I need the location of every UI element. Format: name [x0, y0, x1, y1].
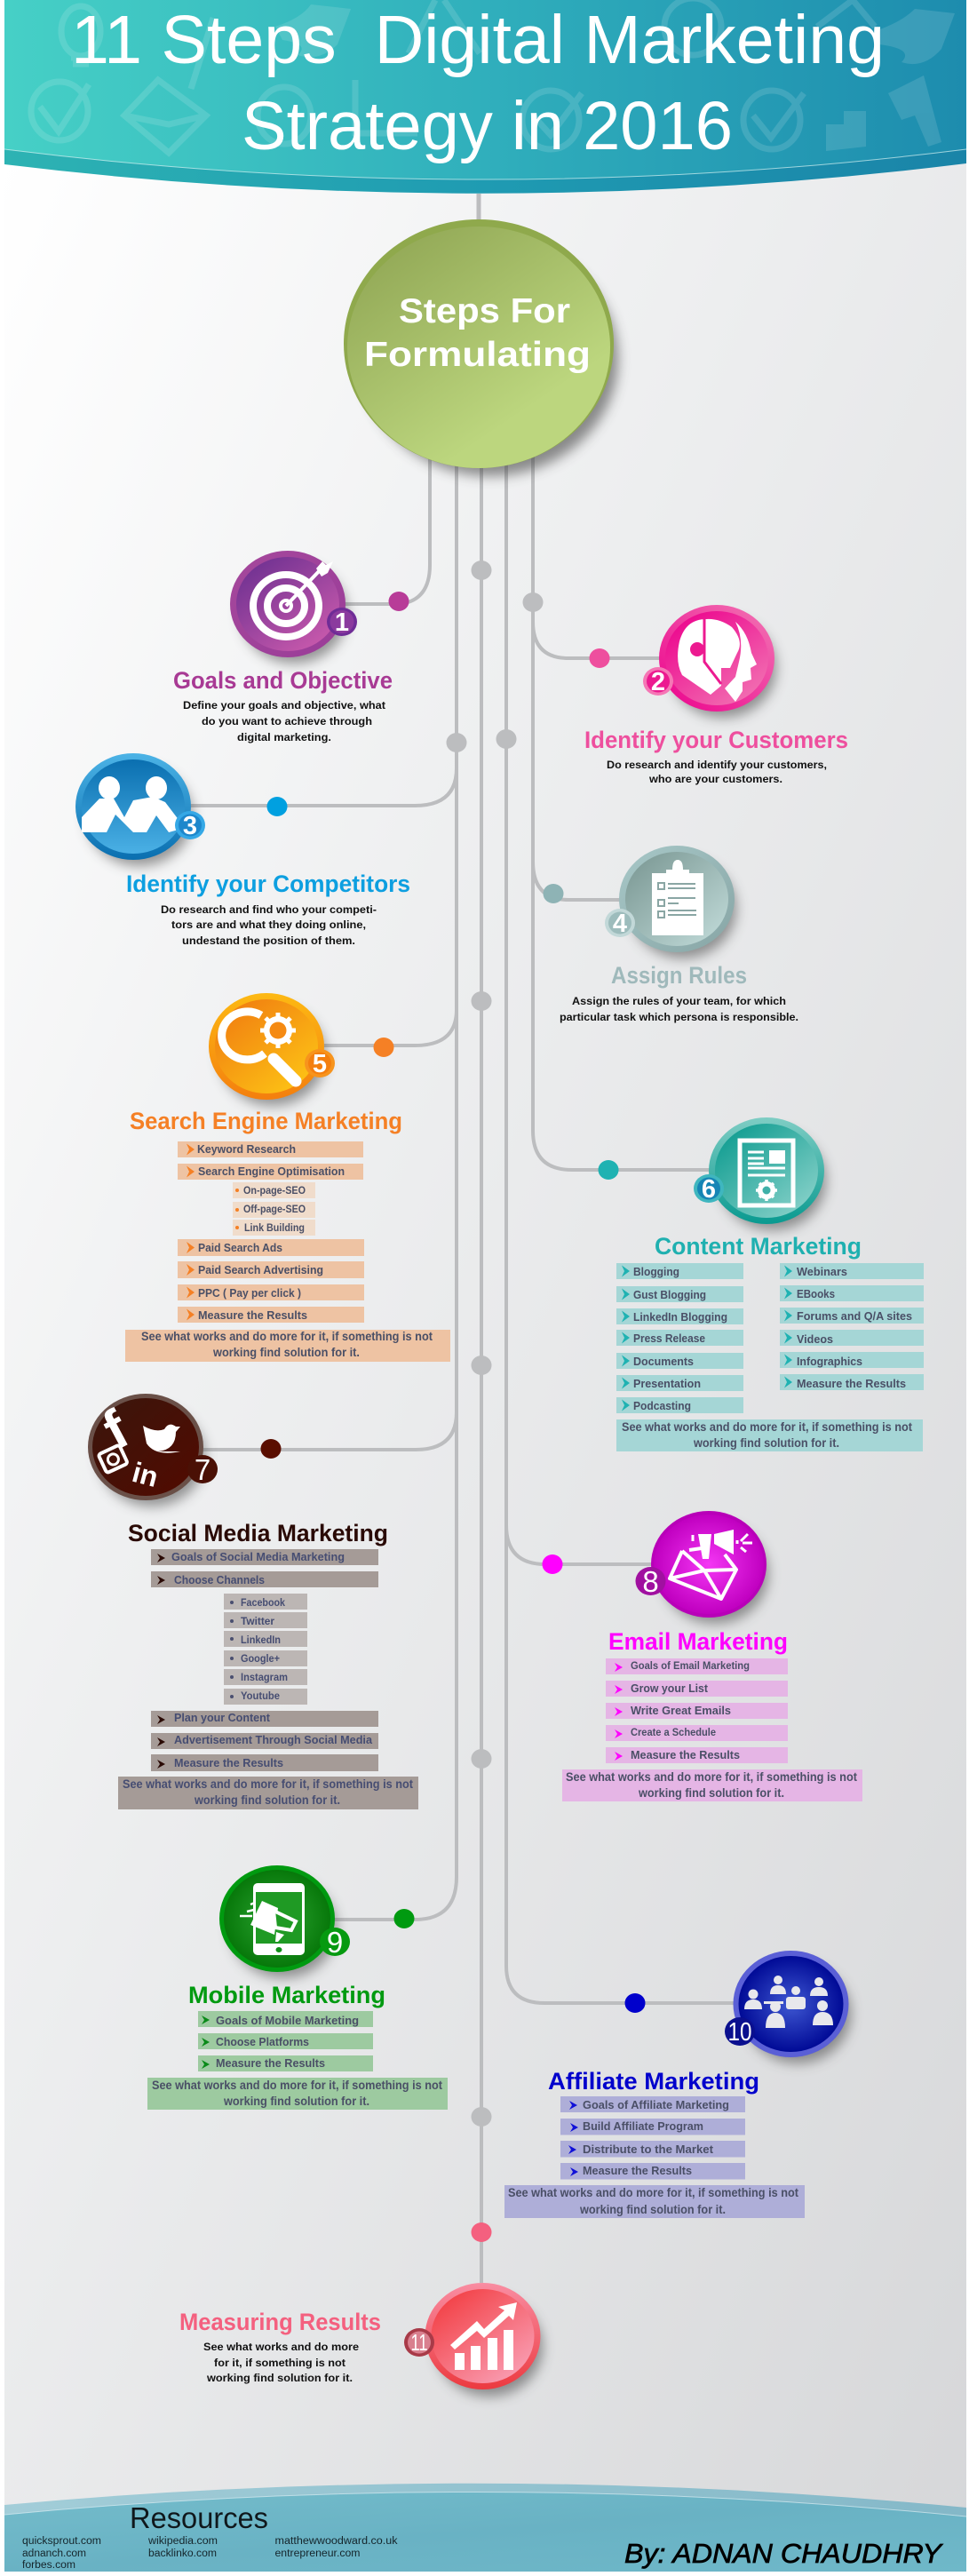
icons: header watermark pattern	[31, 0, 875, 153]
list: Measure the Results	[583, 2165, 692, 2177]
list: Facebook	[241, 1596, 285, 1609]
icon: tablet with megaphone	[219, 1865, 337, 1978]
panel: step 5 search engine marketing	[125, 993, 450, 1362]
list: Distribute to the Market	[583, 2143, 714, 2156]
list: Keyword Research	[197, 1143, 296, 1156]
badge 1	[327, 608, 357, 637]
heading: Mobile Marketing	[188, 1982, 385, 2008]
list: Podcasting	[633, 1400, 691, 1412]
list: Measure the Results	[216, 2057, 325, 2070]
icon: two people	[75, 753, 193, 866]
heading: Measuring Results	[179, 2309, 381, 2335]
list: Documents	[633, 1356, 694, 1368]
icon: magnifier with gear	[209, 993, 326, 1106]
panel: step 6 content marketing	[599, 1117, 924, 1451]
description: Do research and identify your customers,	[607, 759, 827, 771]
dot 1	[389, 592, 409, 611]
list	[125, 1141, 450, 1362]
list: PPC ( Pay per click )	[198, 1287, 301, 1300]
description: Assign the rules of your team, for which	[572, 995, 786, 1007]
panel: step 9 mobile marketing	[147, 1865, 448, 2110]
list: Press Release	[633, 1332, 705, 1345]
resource links: wikipedia.com	[147, 2536, 218, 2547]
description: Define your goals and objective, what	[183, 699, 385, 712]
list: Paid Search Ads	[198, 1242, 282, 1254]
list: Measure the Results	[198, 1309, 307, 1322]
badge 8: 8	[642, 1565, 659, 1598]
list: Choose Channels	[174, 1574, 265, 1586]
title	[71, 2, 885, 164]
description: working find solution for it.	[206, 2372, 353, 2384]
description	[203, 2341, 359, 2384]
dot 2	[590, 648, 609, 668]
badge 5	[305, 1049, 335, 1078]
resource links	[22, 2536, 398, 2571]
list: Link Building	[244, 1221, 305, 1234]
list: See what works and do more for it, if something is not	[622, 1420, 912, 1434]
icon: social networks: in	[129, 1456, 162, 1493]
title: Strategy in 2016	[242, 88, 733, 164]
heading: Affiliate Marketing	[548, 2068, 759, 2095]
badge 8	[636, 1565, 666, 1598]
description: do you want to achieve through	[202, 715, 372, 727]
description: tors are and what they doing online,	[171, 918, 366, 931]
panel: step 10 affiliate marketing	[504, 1951, 851, 2218]
badge 11: 11	[410, 2329, 428, 2356]
dot 3	[266, 797, 288, 816]
list: Youtube	[241, 1690, 280, 1702]
list: Build Affiliate Program	[583, 2120, 703, 2133]
panel: step 11 measuring results	[179, 2222, 543, 2397]
list: Measure the Results	[174, 1757, 283, 1769]
badge 10: 10	[728, 2018, 751, 2047]
list: working find solution for it.	[693, 1436, 839, 1450]
timeline connector lines	[187, 194, 735, 2283]
dot 10	[625, 1993, 645, 2013]
list: Forums and Q/A sites	[797, 1310, 912, 1323]
central circle: steps for formulating: Steps For	[399, 292, 570, 330]
gray timeline nodes	[446, 561, 544, 2127]
icon: social networks: f	[93, 1399, 139, 1461]
list: Twitter	[241, 1615, 274, 1627]
badge 6: 6	[702, 1175, 716, 1204]
list: Blogging	[633, 1266, 679, 1278]
resource links: adnanch.com	[22, 2548, 86, 2559]
list: Goals of Mobile Marketing	[216, 2015, 359, 2027]
list: working find solution for it.	[579, 2203, 726, 2216]
list: Google+	[241, 1652, 280, 1665]
panel: step 8 email marketing	[542, 1511, 862, 1801]
badge 1: 1	[335, 608, 349, 637]
central circle: steps for formulating	[344, 219, 618, 476]
icon: customer head	[659, 605, 776, 718]
list: Goals of Affiliate Marketing	[583, 2099, 729, 2111]
list: working find solution for it.	[638, 1786, 784, 1800]
list: See what works and do more for it, if something is not	[152, 2079, 442, 2092]
title: 11 Steps Digital Marketing	[71, 2, 885, 78]
resource links: quicksprout.com	[22, 2536, 101, 2547]
list: Infographics	[797, 1356, 862, 1368]
list: Choose Platforms	[216, 2036, 309, 2048]
panel: step 3 identify your competitors	[75, 753, 410, 947]
heading: Search Engine Marketing	[130, 1108, 402, 1134]
list: Off-page-SEO	[243, 1203, 306, 1215]
header banner	[4, 0, 966, 194]
dot 9	[394, 1909, 414, 1928]
list: working find solution for it.	[212, 1346, 360, 1359]
heading: Goals and Objective	[173, 667, 393, 694]
list: On-page-SEO	[243, 1184, 306, 1197]
heading: Identify your Competitors	[126, 871, 410, 897]
list: working find solution for it.	[223, 2095, 369, 2108]
list: Instagram	[241, 1671, 288, 1683]
list: Write Great Emails	[631, 1705, 731, 1717]
list: Videos	[797, 1333, 833, 1346]
list: Paid Search Advertising	[198, 1264, 323, 1276]
list: Grow your List	[631, 1682, 709, 1695]
panel: step 1 goals and objective	[173, 551, 409, 743]
resource links: entrepreneur.com	[275, 2548, 361, 2559]
list: LinkedIn	[241, 1634, 281, 1646]
list: See what works and do more for it, if something is not	[141, 1330, 433, 1343]
icon: envelope and megaphone	[651, 1511, 768, 1624]
panel: step 2 identify your customers	[584, 605, 848, 785]
description: Do research and find who your competi-	[161, 903, 377, 916]
footer band	[4, 2484, 966, 2572]
heading: Email Marketing	[608, 1628, 788, 1655]
list: Goals of Email Marketing	[631, 1659, 750, 1672]
dot 6	[599, 1160, 618, 1180]
list	[504, 2096, 805, 2218]
list: Measure the Results	[631, 1749, 740, 1761]
badge 3: 3	[183, 812, 197, 840]
badge 9	[320, 1926, 350, 1959]
list: See what works and do more for it, if something is not	[508, 2186, 798, 2199]
central circle: steps for formulating: Formulating	[364, 336, 591, 374]
list: Presentation	[633, 1378, 701, 1390]
heading: Content Marketing	[655, 1233, 862, 1260]
description	[161, 903, 377, 947]
list	[118, 1549, 418, 1809]
panel: step 4 assign rules	[544, 846, 798, 1023]
icon: social networks	[88, 1394, 205, 1507]
list	[616, 1263, 924, 1451]
badge 4	[605, 909, 635, 938]
list: Goals of Social Media Marketing	[171, 1551, 345, 1563]
resource links: matthewwoodward.co.uk	[275, 2536, 398, 2547]
badge 4: 4	[613, 910, 627, 938]
badge 2	[643, 667, 673, 696]
badge 5: 5	[313, 1050, 327, 1078]
badge 9: 9	[327, 1926, 343, 1959]
heading: resources: Resources	[130, 2501, 268, 2534]
list: Create a Schedule	[631, 1726, 716, 1738]
list: EBooks	[797, 1288, 835, 1300]
badge 6	[694, 1174, 724, 1204]
resource links: forbes.com	[22, 2560, 75, 2571]
description	[560, 995, 798, 1023]
list: Webinars	[797, 1266, 847, 1278]
description: digital marketing.	[237, 731, 331, 743]
description	[183, 699, 385, 743]
list: Advertisement Through Social Media	[174, 1734, 373, 1746]
badge 2: 2	[651, 668, 665, 696]
heading: Assign Rules	[611, 962, 747, 989]
icon: network of people	[734, 1951, 851, 2063]
description: who are your customers.	[648, 773, 782, 785]
list: LinkedIn Blogging	[633, 1311, 727, 1324]
icon: target	[230, 551, 347, 664]
icon: growth chart	[425, 2283, 543, 2397]
dot 11	[471, 2222, 492, 2242]
list: Plan your Content	[174, 1712, 271, 1724]
description: See what works and do more	[203, 2341, 359, 2353]
description: for it, if something is not	[214, 2357, 346, 2369]
list: Gust Blogging	[633, 1289, 706, 1301]
list: working find solution for it.	[194, 1793, 340, 1807]
list: See what works and do more for it, if something is not	[566, 1770, 857, 1784]
list	[562, 1658, 862, 1801]
dot 8	[542, 1554, 563, 1574]
list: Search Engine Optimisation	[198, 1165, 345, 1178]
badge 3	[175, 811, 205, 840]
heading: Social Media Marketing	[128, 1520, 388, 1546]
heading: Identify your Customers	[584, 727, 848, 753]
list: See what works and do more for it, if something is not	[123, 1777, 413, 1791]
dot 5	[373, 1038, 394, 1057]
dot 7	[261, 1439, 281, 1459]
description: particular task which persona is responsible.	[560, 1011, 798, 1023]
dot 4	[544, 884, 563, 903]
resources	[22, 2501, 398, 2571]
badge 7: 7	[195, 1453, 210, 1486]
description: undestand the position of them.	[182, 934, 355, 947]
panel: step 7 social media marketing	[88, 1394, 418, 1809]
icon: document with gear	[709, 1117, 826, 1230]
icon: clipboard	[619, 846, 736, 958]
author credit: By: ADNAN CHAUDHRY	[624, 2538, 943, 2569]
badge 7	[187, 1453, 218, 1486]
resource links: backlinko.com	[148, 2548, 217, 2559]
list	[147, 2011, 448, 2110]
description	[607, 759, 827, 785]
list: Measure the Results	[797, 1378, 906, 1390]
